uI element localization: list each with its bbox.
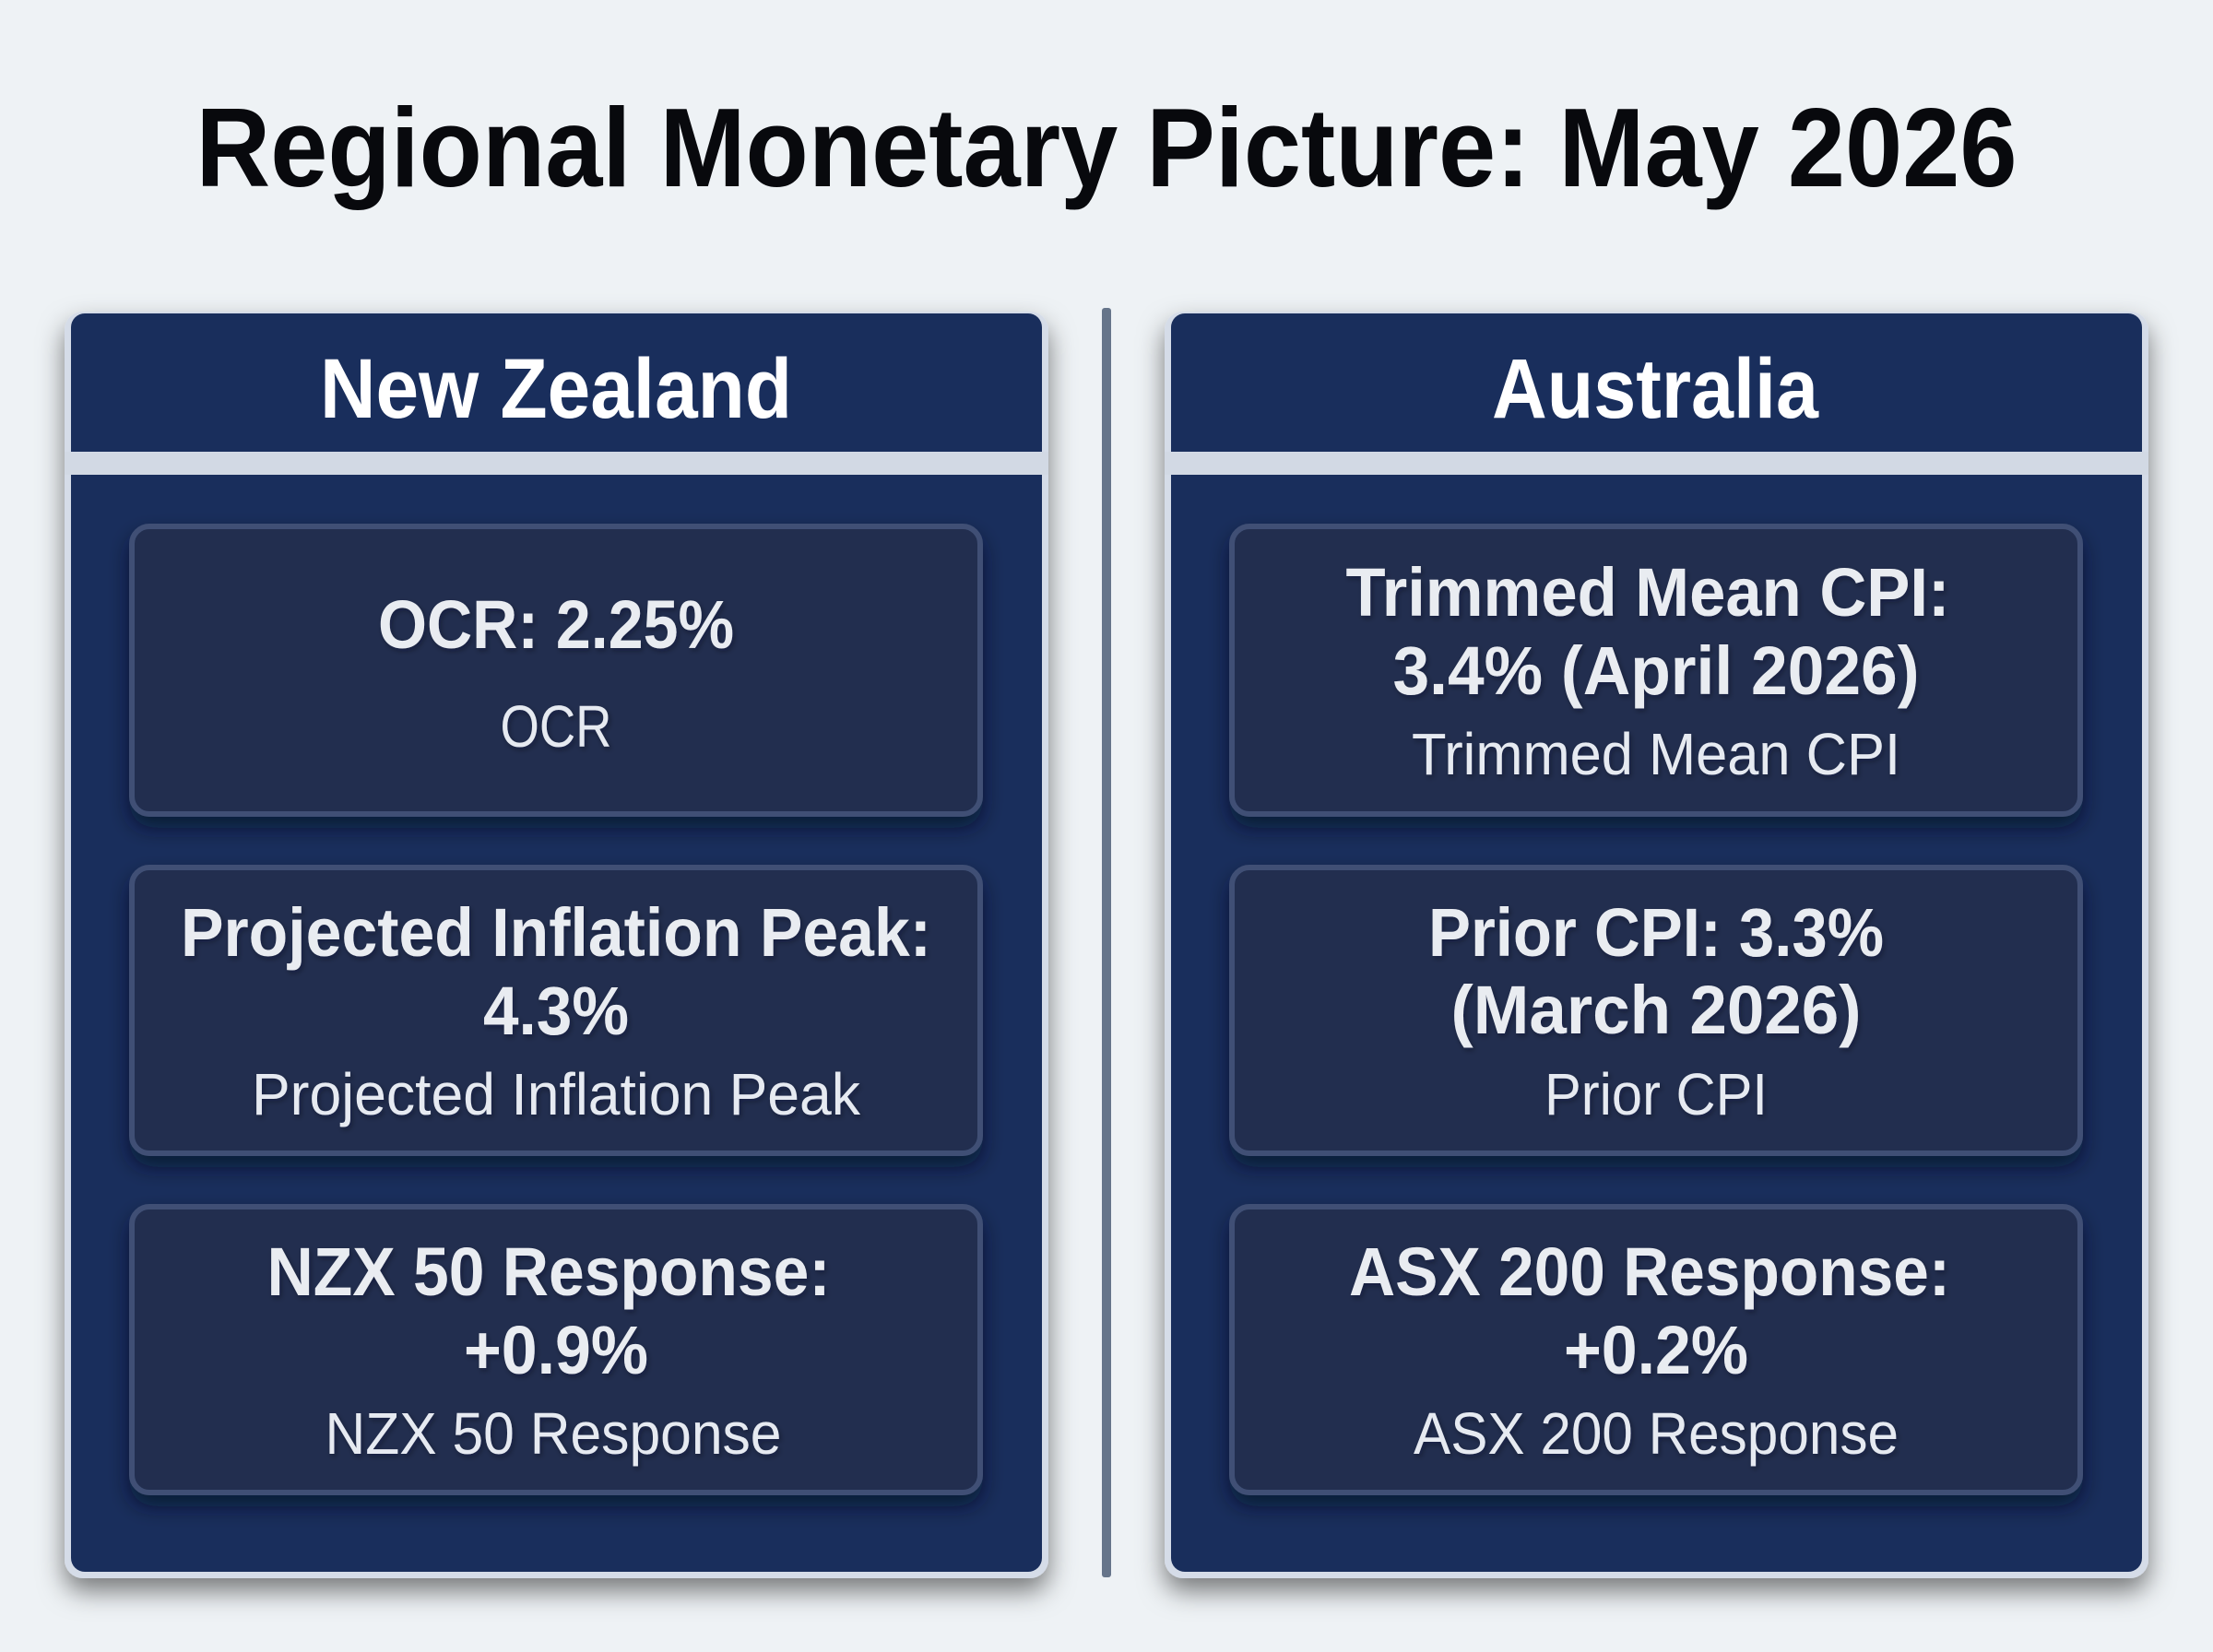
card: Projected Inflation Peak: 4.3% — [483, 973, 629, 1049]
card: Projected Inflation Peak — [132, 867, 980, 1153]
heading: New Zealand: New Zealand — [320, 342, 792, 436]
card: OCR — [132, 526, 980, 814]
card: NZX 50 Response: +0.9% — [464, 1312, 648, 1388]
card: OCR: OCR: 2.25% — [378, 586, 734, 663]
card: Trimmed Mean CPI: 3.4% (April 2026) — [1392, 632, 1920, 709]
card: NZX 50 Response — [132, 1207, 980, 1493]
card: Projected Inflation Peak: Projected Inflation Peak — [252, 1061, 861, 1127]
card: Trimmed Mean CPI: Trimmed Mean CPI: — [1346, 554, 1949, 631]
panel: New Zealand — [65, 312, 1048, 1578]
card: ASX 200 Response: ASX 200 Response: — [1349, 1233, 1950, 1310]
title: Regional Monetary Picture: May 2026 — [195, 85, 2018, 210]
card: Projected Inflation Peak: Projected Inflation Peak: — [181, 894, 931, 971]
card: Prior CPI: (March 2026) — [1451, 972, 1861, 1048]
center divider — [1102, 308, 1111, 1577]
card: Prior CPI: Prior CPI: 3.3% — [1428, 894, 1884, 971]
card: Trimmed Mean CPI — [1232, 526, 2080, 814]
card: Prior CPI: Prior CPI — [1544, 1061, 1768, 1127]
card: NZX 50 Response: NZX 50 Response: — [267, 1233, 830, 1310]
card: ASX 200 Response: +0.2% — [1564, 1312, 1748, 1388]
card: NZX 50 Response: NZX 50 Response — [325, 1400, 782, 1467]
card: ASX 200 Response — [1232, 1207, 2080, 1493]
card: Trimmed Mean CPI: Trimmed Mean CPI — [1412, 721, 1900, 787]
card: OCR: OCR — [500, 693, 612, 760]
card: ASX 200 Response: ASX 200 Response — [1414, 1400, 1899, 1467]
heading: Australia: Australia — [1492, 342, 1819, 436]
panel: Australia — [1165, 312, 2148, 1578]
card: Prior CPI — [1232, 867, 2080, 1153]
